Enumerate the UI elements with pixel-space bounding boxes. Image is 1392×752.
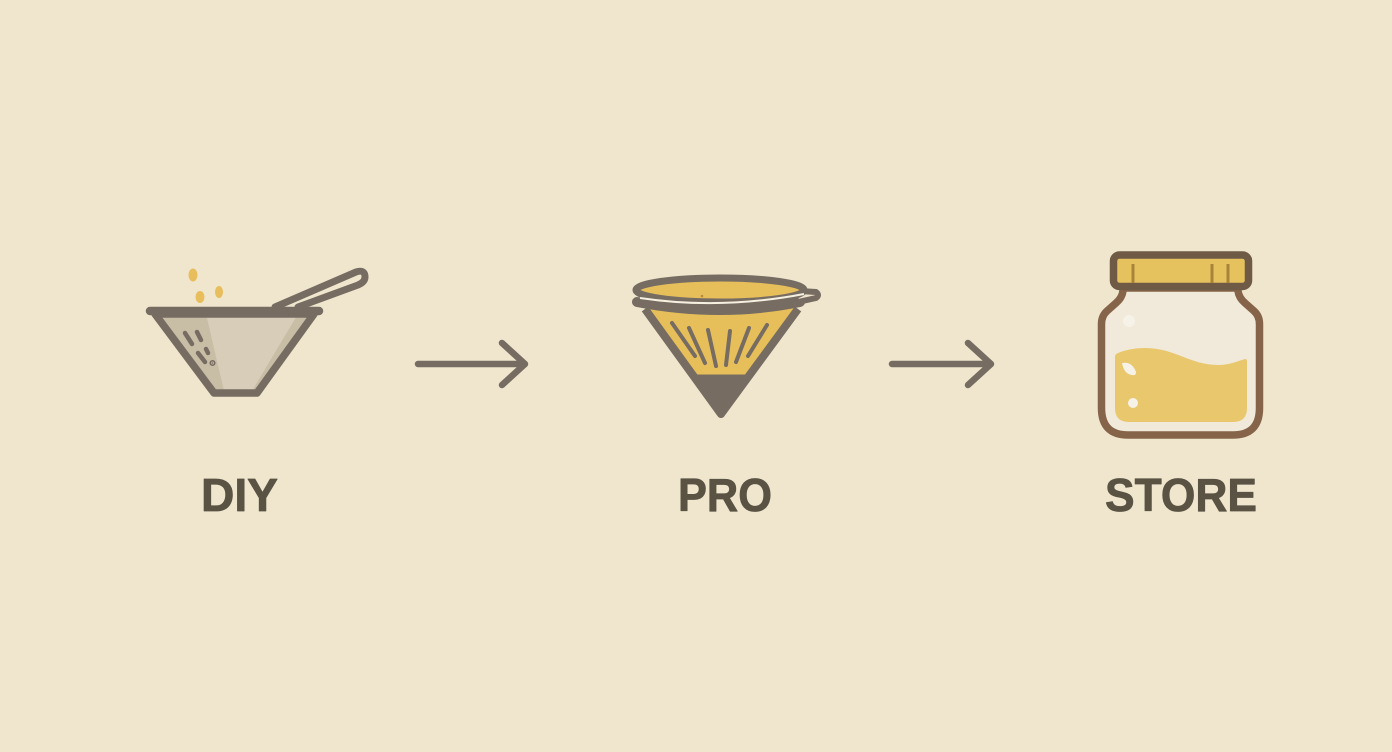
spout <box>798 291 818 302</box>
bowl right shade <box>252 314 314 393</box>
jar highlights <box>1122 315 1138 408</box>
icon: DIY strainer bowl <box>150 268 365 393</box>
bowl left shade <box>155 314 224 393</box>
bowl outline <box>155 314 314 393</box>
falling drops <box>188 268 223 303</box>
cone outline <box>645 309 798 414</box>
white rim highlight <box>640 294 804 303</box>
cone tip <box>697 376 746 415</box>
rim ellipse <box>636 278 804 302</box>
label: STORE: STORE <box>1105 469 1257 521</box>
jar body <box>1102 288 1260 435</box>
bowl rim <box>150 307 319 315</box>
arrow: DIY to Pro <box>418 343 525 385</box>
icon: Pro cone filter <box>636 278 818 415</box>
mesh holes <box>185 332 213 364</box>
label: DIY: DIY <box>201 469 278 521</box>
label: PRO: PRO <box>678 469 772 521</box>
arrow: Pro to Store <box>892 343 991 385</box>
jar lid <box>1114 255 1248 286</box>
icon: Store jar <box>1102 255 1260 435</box>
cone ribs <box>672 323 767 366</box>
lower rim band <box>637 302 800 310</box>
bowl body <box>155 314 314 393</box>
lid ticks <box>1133 264 1228 283</box>
speck <box>701 295 703 297</box>
bowl handle <box>275 271 365 307</box>
honey liquid <box>1115 348 1247 422</box>
cone fill <box>646 307 797 412</box>
